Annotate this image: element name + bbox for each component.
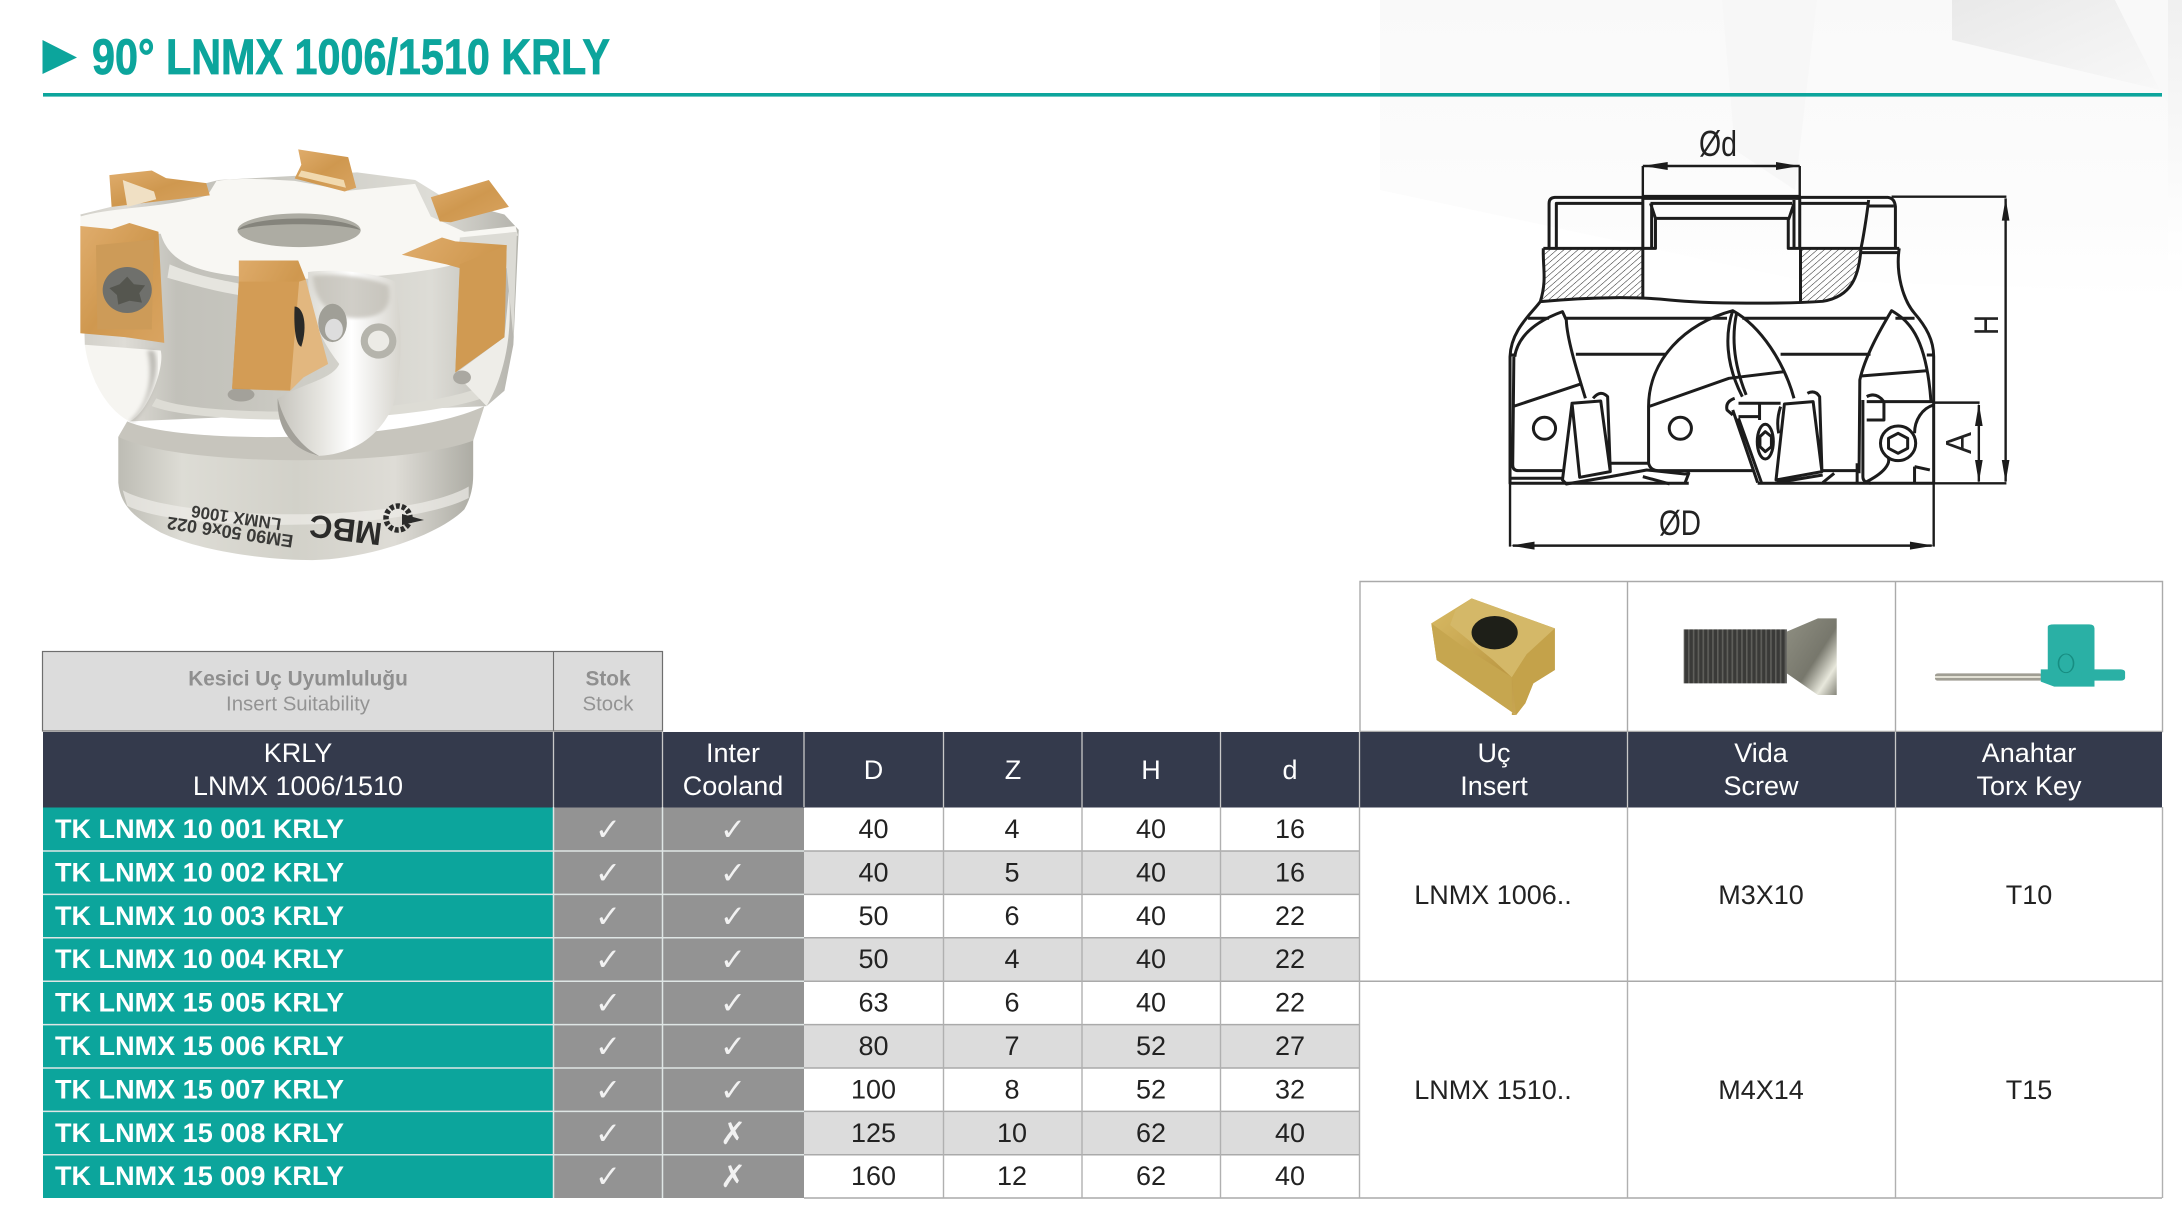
column: H: H <box>1141 755 1161 785</box>
row 6: TK LNMX 15 006 KRLY <box>55 1031 344 1061</box>
row 4: 22 <box>1275 944 1305 974</box>
row 4: 4 <box>1004 944 1020 974</box>
left insert <box>1562 393 1689 484</box>
column: D: D <box>864 755 883 785</box>
engraving: MBC logo: MBC <box>307 508 384 552</box>
insert: back right <box>431 180 509 222</box>
drawing linework <box>1510 162 2009 550</box>
engraving: tool code: EM90 50x6 022 <box>166 513 294 551</box>
row 4 <box>55 942 1305 978</box>
row 4: TK LNMX 10 004 KRLY <box>55 944 344 974</box>
product image: face mill cutter <box>80 149 519 560</box>
column: inter coolant <box>683 738 783 801</box>
insert: front left with screw <box>80 223 164 343</box>
row 8: ✓ <box>595 1116 621 1152</box>
dimension lines <box>1510 166 2006 547</box>
column: torx key <box>1976 738 2082 801</box>
accessory frame <box>1360 582 2162 732</box>
stock and coolant column <box>554 808 804 1198</box>
insert: right <box>402 238 507 372</box>
row 7: 8 <box>1004 1074 1020 1104</box>
row 3: ✓ <box>595 899 621 935</box>
insert: back top <box>295 149 356 192</box>
header: insert suitability: Insert Suitability <box>226 694 371 716</box>
accessory image panel <box>1360 582 2162 732</box>
row 1: 40 <box>1136 814 1166 844</box>
column: screw <box>1723 738 1799 801</box>
row 2: 40 <box>858 857 889 887</box>
row 4: 40 <box>1136 944 1166 974</box>
row 3: 22 <box>1275 901 1305 931</box>
title text: 90° LNMX 1006/1510 KRLY <box>92 29 610 85</box>
row 6: ✓ <box>595 1029 621 1065</box>
column: insert <box>1460 738 1528 801</box>
row 4: ✓ <box>595 942 621 978</box>
row 6: 7 <box>1004 1031 1020 1061</box>
label: outer diameter: ØD <box>1659 504 1701 543</box>
column: inter coolant: Cooland <box>683 771 783 801</box>
column: KRLY: LNMX 1006/1510 <box>193 771 403 801</box>
row 8: 62 <box>1136 1118 1166 1148</box>
row 1: ✓ <box>595 812 621 848</box>
column: insert: Insert <box>1460 771 1528 801</box>
row 5: 63 <box>858 988 889 1018</box>
icon: screw <box>1684 618 1837 695</box>
title rule <box>43 93 2162 97</box>
row 1: 4 <box>1004 814 1020 844</box>
header: insert suitability <box>188 668 408 716</box>
front flute <box>278 271 401 456</box>
column: KRLY <box>193 738 403 801</box>
row 7: 100 <box>851 1074 896 1104</box>
icon: insert <box>1431 598 1555 715</box>
section hatching <box>1540 249 1860 302</box>
row 6: ✓ <box>720 1029 746 1065</box>
accessories group 1510: T15 <box>2006 1075 2052 1105</box>
row 7: 52 <box>1136 1074 1166 1104</box>
accessories group 1006: T10 <box>2006 880 2052 910</box>
column: Z: Z <box>1005 755 1021 785</box>
row 7: TK LNMX 15 007 KRLY <box>55 1074 344 1104</box>
row 8: ✗ <box>720 1116 746 1152</box>
row 5: ✓ <box>720 986 746 1022</box>
row 2: TK LNMX 10 002 KRLY <box>55 857 344 887</box>
column: torx key: Anahtar <box>1982 738 2076 768</box>
row 9: 12 <box>997 1161 1027 1191</box>
accessories group 1006: LNMX 1006.. <box>1414 880 1572 910</box>
accessories group 1510: LNMX 1510.. <box>1414 1075 1572 1105</box>
row 9: TK LNMX 15 009 KRLY <box>55 1161 344 1191</box>
body outline <box>1510 248 1934 483</box>
row 7 <box>55 1072 1305 1108</box>
row 5: 6 <box>1004 988 1020 1018</box>
row 6: 80 <box>858 1031 889 1061</box>
centre bore <box>237 213 361 247</box>
row separators <box>43 807 804 1198</box>
row 2: 40 <box>1136 857 1166 887</box>
row 1 <box>55 812 1305 848</box>
table header row <box>43 732 2162 808</box>
column: KRLY: KRLY <box>264 738 332 768</box>
column: insert: Uç <box>1478 738 1510 768</box>
column: d: d <box>1282 755 1298 785</box>
row 7: 32 <box>1275 1074 1305 1104</box>
row 9: 160 <box>851 1161 896 1191</box>
technical drawing <box>1510 123 2009 550</box>
header: insert suitability: Kesici Uç Uyumluluğu <box>188 668 408 690</box>
row 2: 16 <box>1275 857 1305 887</box>
dimension arrowheads <box>1511 162 2009 550</box>
row 3: 50 <box>858 901 889 931</box>
side flute and pocket marks <box>455 291 510 406</box>
row 7: ✓ <box>720 1072 746 1108</box>
row 8 <box>55 1116 1305 1152</box>
row stripes <box>804 807 2162 1198</box>
row 8: TK LNMX 15 008 KRLY <box>55 1118 344 1148</box>
suitability header <box>42 652 662 731</box>
insert: back left <box>109 170 210 207</box>
label: A: A <box>1938 432 1979 454</box>
title <box>42 29 610 85</box>
row 2: ✓ <box>720 855 746 891</box>
row 2: 5 <box>1004 857 1020 887</box>
row 5: 40 <box>1136 988 1166 1018</box>
cutter body <box>80 172 519 421</box>
row 2: ✓ <box>595 855 621 891</box>
name column <box>43 808 553 1198</box>
row 1: 16 <box>1275 814 1305 844</box>
accessories group 1006: M3X10 <box>1718 880 1804 910</box>
accessories group 1510: M4X14 <box>1718 1075 1804 1105</box>
row 3: 40 <box>1136 901 1166 931</box>
centre flute <box>1649 311 1794 471</box>
row 9 <box>55 1159 1305 1195</box>
row 5: 22 <box>1275 988 1305 1018</box>
row 3: ✓ <box>720 899 746 935</box>
engraving: insert code: LNMX 1006 <box>190 501 282 534</box>
row 8: 40 <box>1275 1118 1305 1148</box>
centre screw and pocket <box>1727 398 1781 483</box>
row 4: 50 <box>858 944 889 974</box>
table body <box>43 807 2162 1198</box>
row 5 <box>55 986 1305 1022</box>
row 3: TK LNMX 10 003 KRLY <box>55 901 344 931</box>
header: stock <box>582 668 634 716</box>
row 2 <box>55 855 1305 891</box>
row 6: 52 <box>1136 1031 1166 1061</box>
left hole <box>1533 417 1556 439</box>
row 9: ✗ <box>720 1159 746 1195</box>
row 9: ✓ <box>595 1159 621 1195</box>
label: height: H <box>1968 315 2006 335</box>
row 9: 40 <box>1275 1161 1305 1191</box>
row 6 <box>55 1029 1305 1065</box>
column: screw: Screw <box>1723 771 1799 801</box>
row 4: ✓ <box>720 942 746 978</box>
row 5: TK LNMX 15 005 KRLY <box>55 988 344 1018</box>
header: stock: Stock <box>582 694 634 716</box>
centre hole <box>1669 417 1691 439</box>
centre insert <box>1776 392 1857 483</box>
right flute <box>1857 311 1931 483</box>
left flute <box>1510 312 1649 478</box>
background: faint polygon texture <box>1380 0 2182 300</box>
accessories group 1006 <box>1414 880 2052 910</box>
coolant holes <box>318 304 347 342</box>
row 8: 10 <box>997 1118 1027 1148</box>
left side shine <box>85 345 161 421</box>
header: stock: Stok <box>585 668 631 690</box>
row 1: 40 <box>858 814 889 844</box>
icon: title arrow <box>42 40 77 74</box>
row 6: 27 <box>1275 1031 1305 1061</box>
insert: front centre <box>232 261 306 391</box>
row 5: ✓ <box>595 986 621 1022</box>
engraving: logo gear <box>386 506 424 530</box>
column: screw: Vida <box>1734 738 1789 768</box>
cutter top face <box>80 179 518 279</box>
row 3: 6 <box>1004 901 1020 931</box>
column: torx key: Torx Key <box>1976 771 2082 801</box>
row 9: 62 <box>1136 1161 1166 1191</box>
accessories group 1510 <box>1414 1075 2052 1105</box>
row 1: TK LNMX 10 001 KRLY <box>55 814 344 844</box>
right screw pocket <box>1863 395 1934 483</box>
row 8: 125 <box>851 1118 896 1148</box>
icon: torx key <box>1935 624 2125 687</box>
row 1: ✓ <box>720 812 746 848</box>
column: inter coolant: Inter <box>706 738 760 768</box>
label: bore diameter: Ød <box>1699 123 1737 164</box>
hub outline <box>1543 197 1899 248</box>
row 7: ✓ <box>595 1072 621 1108</box>
cutter shank <box>118 437 473 560</box>
row 3 <box>55 899 1305 935</box>
